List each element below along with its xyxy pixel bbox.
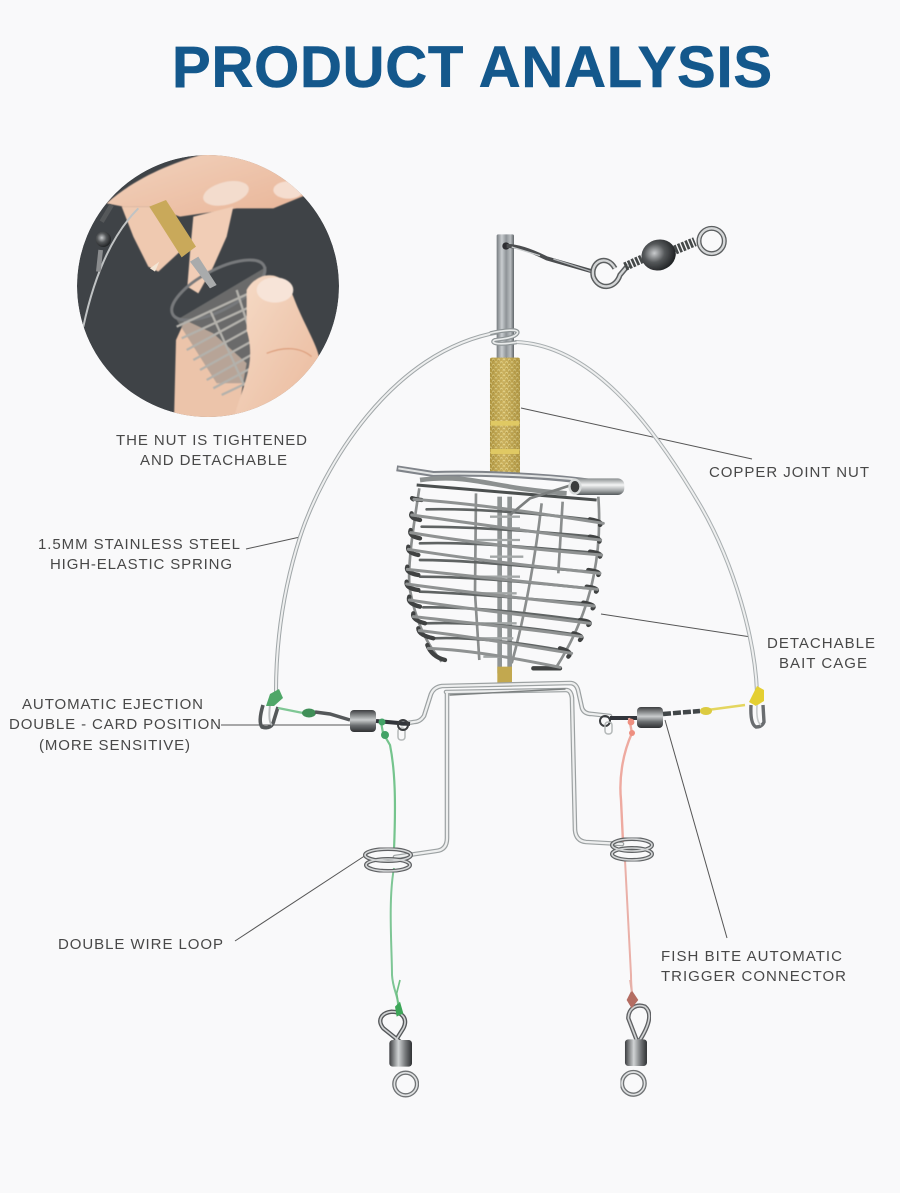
left finger holding nut (122, 207, 182, 272)
brass nut in photo (149, 200, 196, 257)
inset photo: tightening the nut (77, 150, 339, 420)
label: detachable bait cage: DETACHABLE (767, 635, 875, 652)
ribs (409, 488, 599, 667)
clip (398, 728, 405, 740)
middle finger behind cage (187, 207, 233, 293)
label: fish bite trigger connector: FISH BITE AUTOMATIC (661, 948, 842, 965)
label: detachable bait cage (767, 635, 875, 672)
green knot (266, 689, 283, 706)
centre rods (497, 497, 502, 673)
bait cage (397, 468, 624, 687)
label: stainless steel spring (38, 536, 240, 573)
cage rim (397, 468, 610, 490)
coils (407, 498, 603, 668)
brass stub (497, 667, 512, 687)
top eye ring (699, 228, 724, 254)
label: fish bite trigger connector (661, 948, 846, 985)
left barrel swivel (350, 710, 376, 732)
steel wire and swivel in photo (83, 208, 138, 327)
double wire loop right (612, 839, 652, 860)
bottom right swivel (622, 980, 649, 1095)
label: double wire loop: DOUBLE WIRE LOOP (58, 936, 223, 953)
spring arch (276, 332, 757, 692)
label: stainless steel spring: HIGH-ELASTIC SPRING (50, 556, 232, 573)
green line (381, 722, 395, 850)
right barrel swivel (637, 707, 663, 728)
snap ring (593, 260, 628, 286)
label: automatic ejection: (MORE SENSITIVE) (39, 737, 190, 754)
spring loop on rod (490, 330, 518, 344)
yellow line (700, 705, 745, 711)
pink line (620, 718, 632, 842)
steel rod (497, 234, 514, 359)
wire frame (395, 683, 622, 857)
top swivel, rod and copper nut (490, 228, 724, 477)
label: copper joint nut: COPPER JOINT NUT (709, 464, 869, 481)
bottom left swivel (380, 980, 417, 1095)
thumb (233, 275, 319, 420)
coil wires of small cage (170, 258, 267, 396)
label: nut tightened: AND DETACHABLE (140, 452, 287, 469)
label: automatic ejection: DOUBLE - CARD POSITION (9, 716, 221, 733)
double wire loop left (365, 849, 411, 871)
title: PRODUCT ANALYSIS (172, 35, 772, 100)
snap wire (507, 246, 593, 272)
clip (600, 716, 610, 726)
copper nut (490, 358, 520, 477)
label: automatic ejection (9, 696, 221, 754)
cage tube and inner wire (510, 485, 572, 515)
label: detachable bait cage: BAIT CAGE (779, 655, 867, 672)
label: nut tightened: THE NUT IS TIGHTENED (116, 432, 307, 449)
right trigger assembly (600, 686, 764, 1005)
left wire ring (260, 705, 278, 728)
label: stainless steel spring: 1.5MM STAINLESS STEEL (38, 536, 240, 553)
barrel bead (625, 258, 643, 267)
lower finger (174, 320, 247, 420)
leader lines (221, 408, 752, 941)
label: fish bite trigger connector: TRIGGER CONNECTOR (661, 968, 846, 985)
cage interior shade (177, 267, 267, 383)
label: nut tightened (116, 432, 307, 469)
left trigger assembly (260, 689, 410, 1005)
hand top fingers (107, 150, 310, 217)
label: automatic ejection: AUTOMATIC EJECTION (22, 696, 203, 713)
